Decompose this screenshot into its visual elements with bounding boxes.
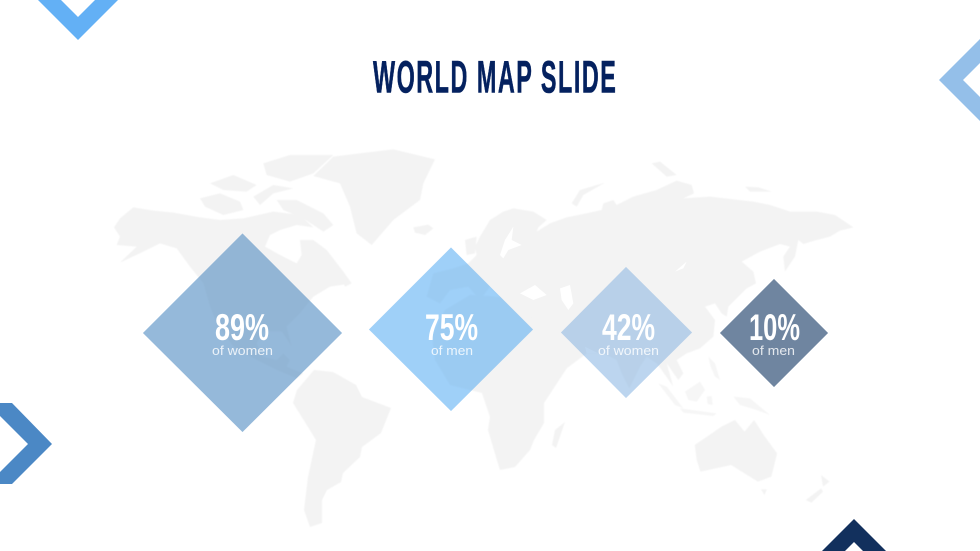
value: 42% xyxy=(602,307,655,348)
map: North America and Greenland xyxy=(114,149,435,378)
stat: 75% of men xyxy=(369,248,533,411)
map: South America, Africa, Madagascar, Australia, New Zealand xyxy=(293,295,830,527)
title: WORLD MAP SLIDE xyxy=(373,52,616,103)
stat: 89% of women xyxy=(143,234,342,432)
caption: of men xyxy=(431,343,473,358)
diamond xyxy=(369,248,533,411)
caption: of women xyxy=(598,343,659,358)
value: 10% xyxy=(749,307,800,348)
map: inland seas xyxy=(500,227,687,353)
map: Southeast Asian islands xyxy=(658,357,770,416)
stat: 10% of men xyxy=(720,279,828,387)
map: Canadian Arctic islands xyxy=(200,155,333,232)
world map xyxy=(114,149,853,527)
chevron: top right xyxy=(939,39,980,121)
chevron: bottom right xyxy=(822,519,886,551)
map: Eurasia and islands xyxy=(427,162,853,388)
chevron: bottom left xyxy=(0,403,52,484)
diamond xyxy=(720,279,828,387)
caption: of men xyxy=(752,343,795,358)
chevron: top left xyxy=(38,0,118,40)
value: 75% xyxy=(425,307,478,348)
value: 89% xyxy=(215,307,269,348)
diamond xyxy=(143,234,342,432)
diamond xyxy=(561,267,692,398)
caption: of women xyxy=(212,343,273,358)
stat: 42% of women xyxy=(561,267,692,398)
